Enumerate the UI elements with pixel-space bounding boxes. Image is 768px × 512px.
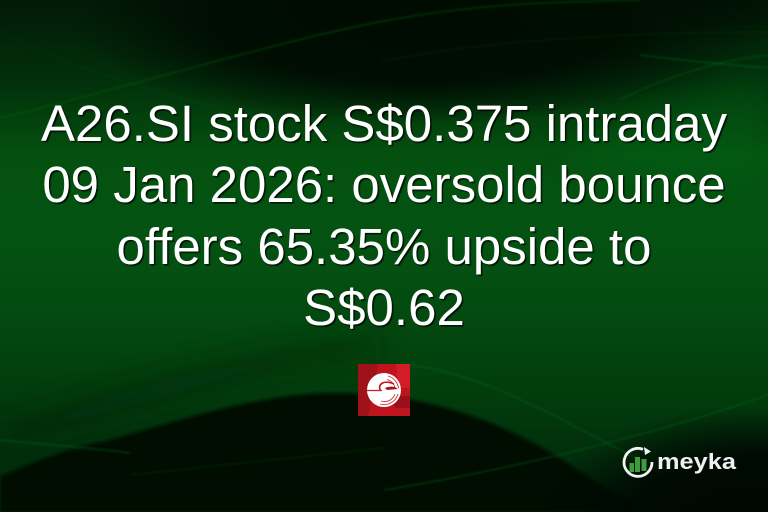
icon: company logo on red square <box>358 364 410 416</box>
title: A26.SI stock S$0.375 intraday <box>41 94 727 152</box>
title <box>41 94 728 336</box>
wordmark: meyka <box>657 449 737 474</box>
title: offers 65.35% upside to <box>117 218 651 274</box>
brand logo: meyka <box>622 446 737 478</box>
title: S$0.62 <box>303 279 465 336</box>
title: 09 Jan 2026: oversold bounce <box>42 156 726 213</box>
icon: circular arrow with green bars <box>624 447 652 476</box>
